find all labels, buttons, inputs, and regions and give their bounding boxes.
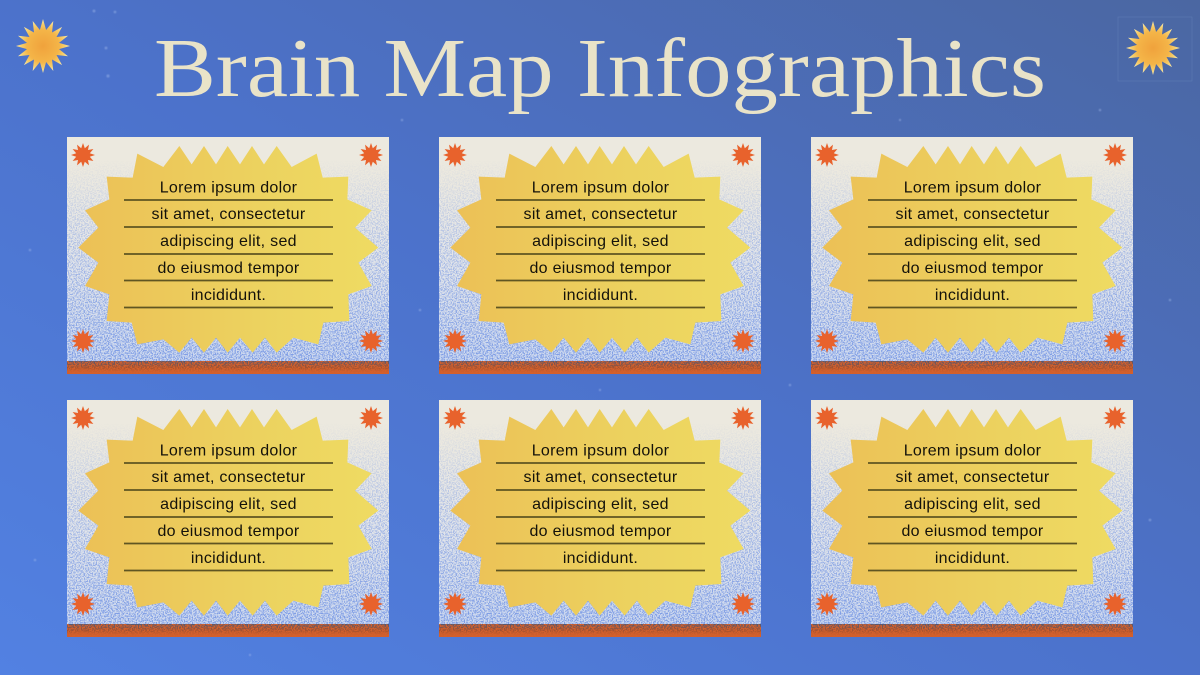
panel 6 text: incididunt.: [935, 550, 1010, 567]
panel 1 text: sit amet, consectetur: [152, 206, 306, 223]
panel 4 text: Lorem ipsum dolor: [160, 442, 298, 460]
panel 1 text: [124, 180, 333, 308]
title: Brain Map Infographics: [154, 22, 1046, 115]
panel 1: [67, 137, 389, 374]
panel 2 text: [496, 180, 705, 308]
panel 1 corner stars: [71, 143, 383, 353]
panel 4 text: incididunt.: [191, 550, 266, 567]
panel 2: [439, 137, 761, 374]
panel 2 text: do eiusmod tempor: [529, 260, 672, 277]
panel 6 text: sit amet, consectetur: [896, 469, 1050, 486]
panel 2 text: adipiscing elit, sed: [532, 233, 669, 250]
panel 4 text: [124, 442, 333, 570]
panel 6 text: [868, 442, 1077, 570]
panel 2 corner stars: [443, 143, 755, 353]
panel 6: [811, 400, 1133, 637]
panel 5: [439, 400, 761, 637]
panel 6 text: do eiusmod tempor: [901, 523, 1044, 540]
panel 4 corner stars: [71, 406, 383, 616]
panel 5 text: do eiusmod tempor: [529, 523, 672, 540]
panel 4: [67, 400, 389, 637]
panel 3 corner stars: [815, 143, 1127, 353]
panel 2 text: sit amet, consectetur: [524, 206, 678, 223]
panel 3: [811, 137, 1133, 374]
panel 3 text: sit amet, consectetur: [896, 206, 1050, 223]
panel 4 text: do eiusmod tempor: [157, 523, 300, 540]
panel 1 text: incididunt.: [191, 287, 266, 304]
panel 3 text: adipiscing elit, sed: [904, 233, 1041, 250]
panel 6 corner stars: [815, 406, 1127, 616]
icon: sun right: [1118, 17, 1192, 81]
icon: sun left: [16, 19, 70, 73]
panel 5 corner stars: [443, 406, 755, 616]
panel 1 text: Lorem ipsum dolor: [160, 180, 298, 196]
panel 5 text: incididunt.: [563, 550, 638, 567]
panel 4 text: sit amet, consectetur: [152, 469, 306, 486]
panel 2 text: incididunt.: [563, 287, 638, 304]
panel 5 text: Lorem ipsum dolor: [532, 442, 670, 460]
panel 3 text: Lorem ipsum dolor: [904, 180, 1042, 196]
panel 5 text: [496, 442, 705, 570]
panel 3 text: incididunt.: [935, 287, 1010, 304]
panel 3 text: do eiusmod tempor: [901, 260, 1044, 277]
panel 3 text: [868, 180, 1077, 308]
panel 6 text: Lorem ipsum dolor: [904, 442, 1042, 460]
panel 5 text: adipiscing elit, sed: [532, 496, 669, 513]
panel 1 text: adipiscing elit, sed: [160, 233, 297, 250]
panel 4 text: adipiscing elit, sed: [160, 496, 297, 513]
panel 6 text: adipiscing elit, sed: [904, 496, 1041, 513]
panel 1 text: do eiusmod tempor: [157, 260, 300, 277]
panel 2 text: Lorem ipsum dolor: [532, 180, 670, 196]
panel 5 text: sit amet, consectetur: [524, 469, 678, 486]
